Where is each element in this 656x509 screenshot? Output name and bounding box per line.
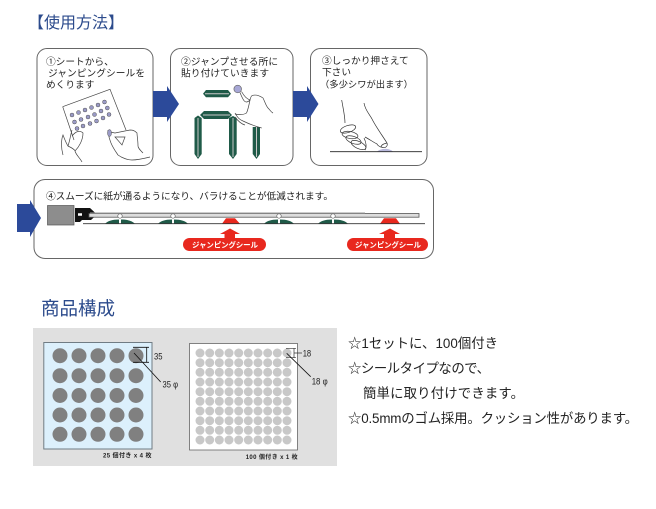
step 2 text <box>181 55 278 80</box>
text block: product features <box>348 336 638 426</box>
step 1 text <box>46 56 145 91</box>
green seals <box>105 220 348 224</box>
step 3 text: （多少シワが出ます） <box>320 78 413 90</box>
panel: step 3 <box>310 48 427 166</box>
panel: product sheets <box>33 328 337 466</box>
icon: green seals on a page corner <box>194 90 260 159</box>
text block: product features: ☆1セットに、100個付き <box>348 336 498 351</box>
step 2 text: ②ジャンプさせる所に <box>181 55 278 68</box>
step 1 text: めくります <box>46 79 94 91</box>
arrow: step 1 to 2 <box>153 86 179 122</box>
dimension lines: 35 <box>133 347 161 382</box>
callout: jumping seal left: ジャンピングシール <box>192 240 258 250</box>
sheet: 100 seals: 100 個付き x 1 枚 <box>246 453 298 461</box>
step 3 text <box>320 54 413 90</box>
callout: jumping seal right: ジャンピングシール <box>355 240 422 250</box>
heading: how to use: 【使用方法】 <box>28 14 124 32</box>
sheet: 100 seals <box>190 344 328 461</box>
panel: step 1 <box>37 48 153 166</box>
text block: product features: 簡単に取り付けできます。 <box>363 386 524 401</box>
step 1 text: ジャンピングシールを <box>48 66 145 80</box>
panel: step 2 <box>170 48 293 166</box>
callout: jumping seal left <box>183 228 266 251</box>
paper sheet <box>89 214 419 217</box>
step 4 text: ④スムーズに紙が通るようになり、バラけることが低減されます。 <box>46 190 333 202</box>
sticker bump under thumb <box>377 149 393 152</box>
panel: step 4 <box>34 180 434 258</box>
text block: product features: ☆シールタイプなので、 <box>348 361 490 376</box>
sheet: 25 seals: 35 <box>154 352 162 362</box>
black guide roller <box>75 208 97 222</box>
sheet: 25 seals: 25 個付き x 4 枚 <box>103 452 152 460</box>
arrow: to step 4 <box>17 200 41 237</box>
step 3 text: 下さい <box>322 66 351 78</box>
step 3 text: ③しっかり押さえて <box>322 54 409 67</box>
step 2 text: 貼り付けていきます <box>181 66 269 80</box>
heading: product contents: 商品構成 <box>41 298 115 319</box>
icon: sheet with hands <box>62 89 150 162</box>
step 1 text: ①シートから、 <box>46 56 114 68</box>
text block: product features: ☆0.5mmのゴム採用。クッション性があります。 <box>348 410 638 426</box>
sheet: 100 seals: 18 <box>303 348 311 358</box>
icon: hand pressing down <box>339 100 387 152</box>
machine block <box>48 206 74 225</box>
diagram: paper path <box>48 206 425 225</box>
red seals <box>222 218 400 224</box>
sheet: 100 seals: 18 φ <box>312 376 328 386</box>
icon: hands placing seal <box>235 92 273 128</box>
dimension lines: 18 <box>286 348 302 358</box>
sheet: 25 seals <box>44 342 178 460</box>
arrow: step 2 to 3 <box>293 86 318 122</box>
sheet: 25 seals: 35 φ <box>162 380 178 390</box>
callout: jumping seal right <box>347 228 428 251</box>
